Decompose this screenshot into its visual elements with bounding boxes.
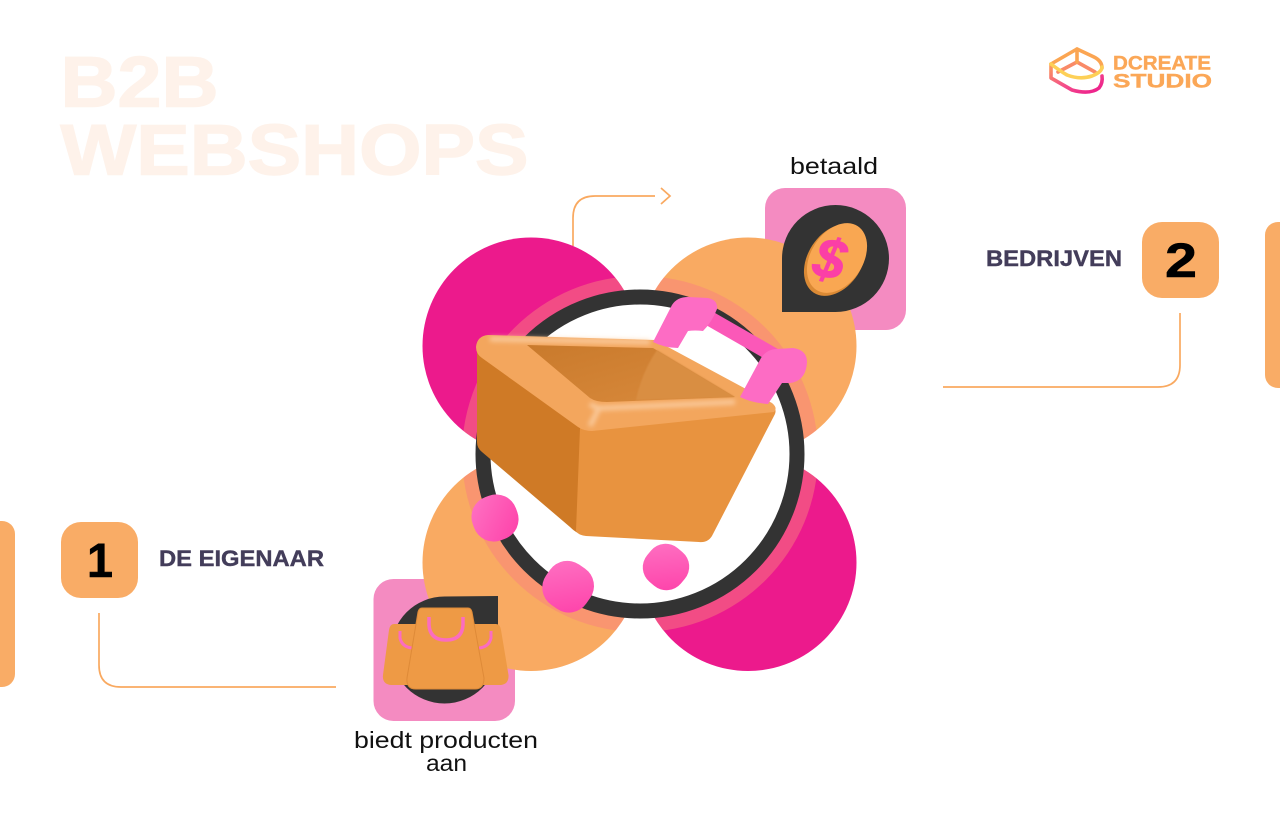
panel: betaald tile [765,188,906,330]
label: biedt producten aan: biedt producten [354,727,538,753]
badge: number 1 [61,522,138,598]
icon: coin in teardrop: $ [807,224,853,293]
cart handle bar [707,317,775,356]
cart opening [527,345,735,402]
circle cluster [422,238,856,671]
badge: number 1: 1 [87,535,113,588]
label: biedt producten aan [354,727,538,776]
cart rim [476,335,776,431]
cart handle posts [653,297,807,404]
rim highlight [490,339,735,426]
heading: de eigenaar: DE EIGENAAR [159,546,324,571]
center bag [407,608,484,689]
label: betaald: betaald [790,153,878,179]
title [60,44,528,190]
cart wheels [466,489,697,621]
logo: Dcreate Studio [1051,49,1212,92]
badge: number 2 [1142,222,1219,298]
icon: shopping bags in teardrop [383,596,509,704]
cart right face [576,408,776,542]
side tab: left [0,521,15,687]
icon: coin in teardrop [782,205,889,312]
logo: Dcreate Studio: STUDIO [1113,72,1212,92]
connector: companies line [943,313,1180,387]
title: WEBSHOPS [60,112,528,190]
side tab: right [1265,222,1280,388]
panel: biedt producten tile [374,579,515,721]
label: biedt producten aan: aan [426,750,467,776]
arrow: top connector [573,188,670,246]
connector: owner line [99,613,336,687]
icon: shopping cart [466,297,807,621]
badge: number 2: 2 [1165,235,1197,288]
cart left face [477,345,590,533]
heading: bedrijven: BEDRIJVEN [986,246,1122,271]
left bag [383,624,430,685]
logo: Dcreate Studio: DCREATE [1113,54,1211,74]
title: B2B [60,44,218,122]
right bag [460,624,509,685]
